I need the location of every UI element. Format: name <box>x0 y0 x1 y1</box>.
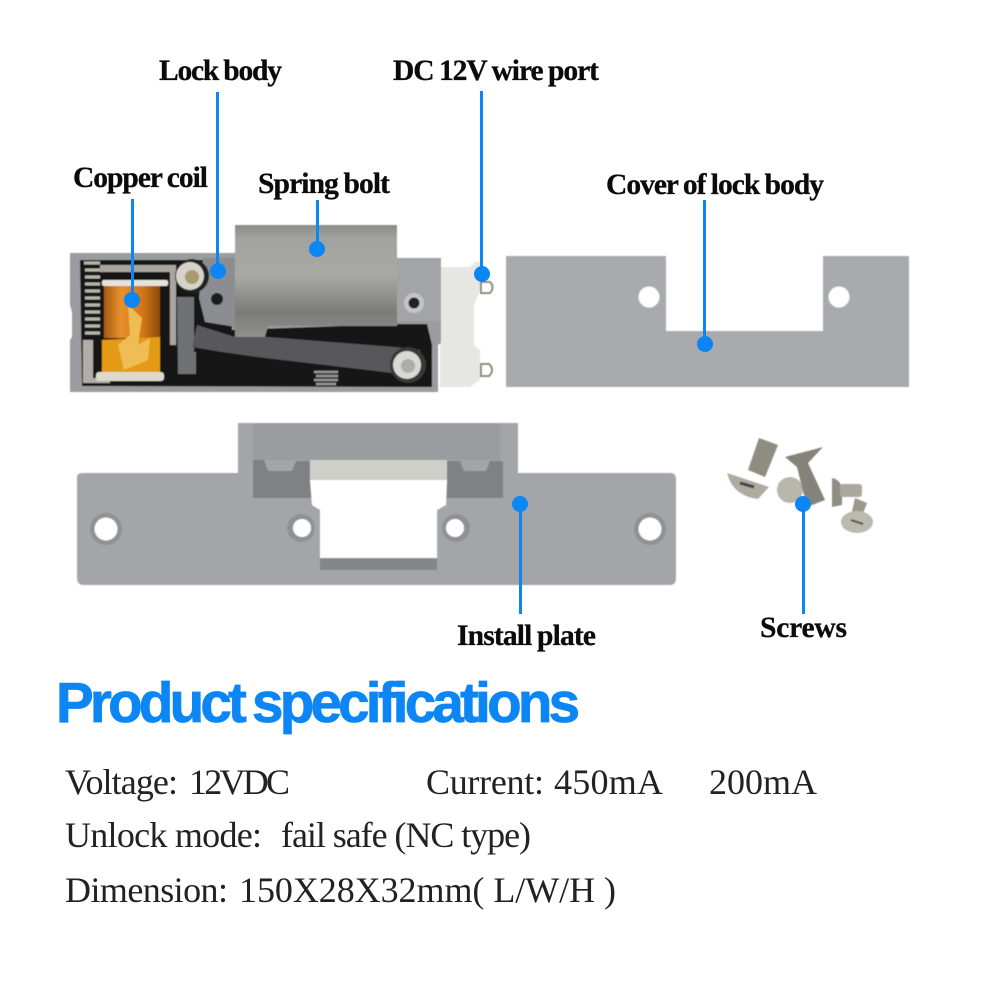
lock body block <box>199 258 236 327</box>
housing cavity <box>80 260 432 387</box>
lever arm <box>192 325 420 373</box>
spec: dimension <box>65 870 616 910</box>
spec: dimension: Dimension: <box>65 870 228 910</box>
heading: product specifications: Product specifications <box>56 671 580 734</box>
spec: dimension: 150X28X32mm( L/W/H ) <box>239 870 616 910</box>
screw hole right <box>404 293 424 313</box>
strike opening <box>310 480 447 558</box>
plate recess wall <box>253 423 500 460</box>
install plate <box>77 423 676 585</box>
spec: unlock mode: fail safe (NC type) <box>281 815 531 855</box>
coil frame <box>100 265 176 345</box>
pivot roller <box>175 259 209 293</box>
spec: voltage: 12VDC <box>189 762 290 802</box>
screw 2 <box>785 447 825 507</box>
spec: unlock mode <box>65 815 531 855</box>
callout: copper coil: Copper coil <box>73 162 208 194</box>
callout: DC 12V wire port <box>393 55 599 282</box>
callout: cover of lock body: Cover of lock body <box>606 169 824 201</box>
callout: copper coil <box>73 162 208 308</box>
spec: second current: 200mA <box>709 762 817 802</box>
spec: unlock mode: Unlock mode: <box>65 815 262 855</box>
round screw <box>777 477 803 503</box>
small spring <box>314 372 338 384</box>
spec: voltage <box>65 762 290 802</box>
cover of lock body <box>506 256 909 387</box>
screw 1 <box>727 438 778 499</box>
mounting holes <box>90 513 666 545</box>
callout: cover of lock body <box>606 169 824 352</box>
screw 3 <box>832 478 862 507</box>
callout: spring bolt <box>258 168 390 257</box>
callout: screws: Screws <box>760 612 847 644</box>
screw 4 <box>841 498 873 533</box>
copper coil <box>96 280 168 381</box>
lower slot <box>320 558 437 570</box>
right recess <box>445 461 503 498</box>
silver band <box>310 460 447 480</box>
left recess <box>253 460 312 498</box>
lever roller <box>390 347 426 383</box>
screw hole left <box>211 293 223 305</box>
spring <box>84 263 100 333</box>
callout: screws <box>760 496 847 644</box>
callout: install plate: Install plate <box>457 620 596 652</box>
lock body assembly photo <box>70 225 492 392</box>
right housing block <box>397 258 441 321</box>
callout: spring bolt: Spring bolt <box>258 168 390 200</box>
callout: lock body <box>159 55 282 279</box>
lever post <box>177 297 196 374</box>
spec: current: 450mA <box>554 762 663 802</box>
callout: lock body: Lock body <box>159 55 282 87</box>
callout: DC 12V wire port: DC 12V wire port <box>393 55 599 87</box>
screws <box>727 438 873 533</box>
spec: current <box>426 762 663 802</box>
wire port connector <box>440 262 492 387</box>
spec: voltage: Voltage: <box>65 762 178 802</box>
lock housing <box>70 253 441 392</box>
callout: install plate <box>457 496 596 652</box>
spec: current: Current: <box>426 762 544 802</box>
spring bolt shield <box>235 225 397 337</box>
